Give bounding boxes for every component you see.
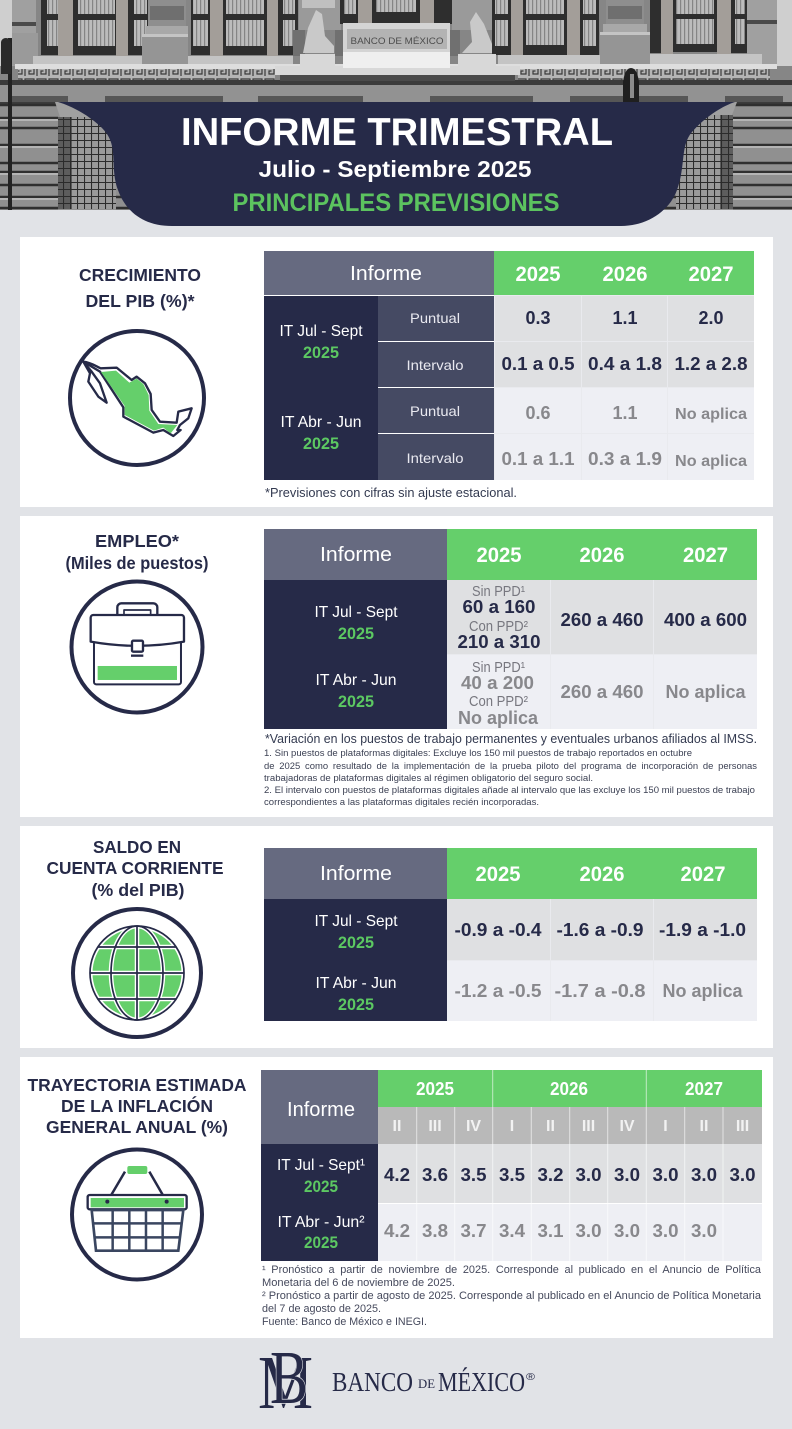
table: trayectoria de la inflación: IT Abr - Jun² bbox=[278, 1214, 365, 1231]
table: trayectoria de la inflación: 3.0 bbox=[691, 1165, 717, 1185]
table: empleo: 2025 bbox=[476, 543, 522, 567]
table: empleo: 2027 bbox=[683, 543, 728, 567]
table: crecimiento del PIB: 0.3 a 1.9 bbox=[588, 449, 662, 469]
table: empleo: 2025 bbox=[338, 625, 374, 643]
table: empleo: 60 a 160 bbox=[462, 597, 536, 617]
header photo: Banco de México building bbox=[0, 0, 792, 210]
table: trayectoria de la inflación: III bbox=[428, 1118, 442, 1135]
logo: Banco de México bbox=[258, 1336, 536, 1425]
logo wordmark: DE bbox=[418, 1376, 435, 1391]
table: trayectoria de la inflación: 3.0 bbox=[691, 1221, 717, 1241]
footnotes: inflación: del 7 de agosto de 2025. bbox=[262, 1303, 381, 1315]
panel: trayectoria de la inflación bbox=[20, 1057, 773, 1338]
footnotes: inflación bbox=[262, 1264, 761, 1328]
table: empleo: 210 a 310 bbox=[458, 632, 540, 652]
table: saldo en cuenta corriente: -1.2 a -0.5 bbox=[454, 981, 542, 1001]
table: saldo en cuenta corriente: 2026 bbox=[580, 862, 625, 886]
heading: empleo bbox=[66, 531, 208, 573]
table: trayectoria de la inflación: 3.0 bbox=[576, 1165, 602, 1185]
table: trayectoria de la inflación: III bbox=[736, 1118, 749, 1135]
table: crecimiento del PIB: 2.0 bbox=[698, 308, 724, 328]
table: crecimiento del PIB: Intervalo bbox=[406, 357, 464, 373]
logo wordmark: BANCO bbox=[332, 1367, 413, 1397]
table: empleo: 260 a 460 bbox=[560, 610, 644, 630]
table: saldo en cuenta corriente: 2027 bbox=[680, 862, 726, 886]
table: trayectoria de la inflación bbox=[261, 1070, 762, 1261]
footnotes: empleo: trabajadoras de plataformas digitales al régimen obligatorio del seguro social. bbox=[264, 773, 593, 783]
table: crecimiento del PIB: No aplica bbox=[675, 406, 747, 423]
table: trayectoria de la inflación: Informe bbox=[287, 1099, 355, 1121]
table: empleo: No aplica bbox=[458, 708, 539, 728]
table: crecimiento del PIB bbox=[264, 251, 754, 480]
panel: crecimiento del PIB bbox=[20, 237, 773, 507]
table: saldo en cuenta corriente: IT Jul - Sept bbox=[314, 913, 398, 930]
table: saldo en cuenta corriente: No aplica bbox=[662, 981, 743, 1001]
panel: saldo en cuenta corriente bbox=[20, 826, 773, 1048]
footnotes: inflación: ¹ Pronóstico a partir de noviembre de 2025. Corresponde al publicado en el Anuncio de Política bbox=[262, 1264, 761, 1276]
icon: shopping basket bbox=[72, 1150, 202, 1280]
table: crecimiento del PIB: Informe bbox=[350, 263, 422, 285]
table: saldo en cuenta corriente: 2025 bbox=[476, 862, 521, 886]
footnotes: empleo bbox=[264, 732, 758, 807]
footnotes: empleo: 2. El intervalo con puestos de plataformas digitales añade al intervalo que las excluye los 150 mil puestos de trabajo bbox=[264, 785, 755, 795]
table: saldo en cuenta corriente: 2025 bbox=[338, 996, 374, 1014]
table: saldo en cuenta corriente: -1.7 a -0.8 bbox=[554, 981, 646, 1001]
table: empleo: Sin PPD¹ bbox=[472, 584, 525, 600]
logo wordmark bbox=[332, 1367, 536, 1397]
table: crecimiento del PIB: 2025 bbox=[303, 435, 339, 453]
table: crecimiento del PIB: 1.1 bbox=[612, 403, 638, 423]
table: trayectoria de la inflación: 2027 bbox=[685, 1079, 723, 1099]
icon: map of Mexico bbox=[70, 331, 204, 465]
table: empleo bbox=[264, 529, 757, 729]
table: trayectoria de la inflación: 3.1 bbox=[538, 1221, 564, 1241]
logo wordmark: ® bbox=[526, 1372, 536, 1383]
table: trayectoria de la inflación: 3.0 bbox=[652, 1165, 678, 1185]
table: trayectoria de la inflación: 3.5 bbox=[499, 1165, 525, 1185]
table: saldo en cuenta corriente: -1.6 a -0.9 bbox=[556, 920, 644, 940]
logo wordmark: MÉXICO bbox=[438, 1367, 525, 1397]
table: trayectoria de la inflación: 3.0 bbox=[730, 1165, 756, 1185]
table: crecimiento del PIB: IT Jul - Sept bbox=[280, 323, 363, 340]
table: crecimiento del PIB: 2027 bbox=[688, 262, 734, 286]
footnotes: inflación: Monetaria del 6 de noviembre de 2025. bbox=[262, 1277, 455, 1289]
table: empleo: Con PPD² bbox=[469, 619, 528, 635]
table: trayectoria de la inflación: II bbox=[393, 1118, 401, 1135]
table: trayectoria de la inflación: II bbox=[700, 1118, 708, 1135]
table: empleo: 2025 bbox=[338, 693, 374, 711]
table: trayectoria de la inflación: I bbox=[510, 1118, 514, 1135]
footnotes: empleo: 1. Sin puestos de plataformas digitales: Excluye los 150 mil puestos de trabajo reportados en octubre bbox=[264, 748, 692, 758]
table: saldo en cuenta corriente: -1.9 a -1.0 bbox=[659, 920, 746, 940]
table: trayectoria de la inflación: III bbox=[582, 1118, 595, 1135]
table: saldo en cuenta corriente: -0.9 a -0.4 bbox=[454, 920, 542, 940]
table: trayectoria de la inflación: IV bbox=[619, 1118, 635, 1135]
table: trayectoria de la inflación: I bbox=[663, 1118, 668, 1135]
table: trayectoria de la inflación: 3.0 bbox=[652, 1221, 678, 1241]
table: saldo en cuenta corriente: IT Abr - Jun bbox=[316, 975, 396, 992]
heading: trayectoria de la inflación bbox=[28, 1075, 247, 1137]
table: empleo: 2026 bbox=[580, 543, 625, 567]
table: trayectoria de la inflación: 2026 bbox=[550, 1079, 588, 1099]
table: empleo: Con PPD² bbox=[469, 694, 528, 710]
heading: saldo en cuenta corriente: (% del PIB) bbox=[92, 880, 184, 900]
table: empleo: 400 a 600 bbox=[664, 610, 747, 630]
table: crecimiento del PIB: Puntual bbox=[410, 403, 460, 419]
heading: trayectoria de la inflación: GENERAL ANUAL (%) bbox=[46, 1117, 228, 1137]
heading: trayectoria de la inflación: TRAYECTORIA ESTIMADA bbox=[28, 1075, 247, 1095]
table: trayectoria de la inflación: 4.2 bbox=[384, 1221, 410, 1241]
table: crecimiento del PIB: 2026 bbox=[602, 262, 648, 286]
footnotes: empleo: *Variación en los puestos de trabajo permanentes y eventuales urbanos afiliados al IMSS. bbox=[265, 732, 757, 746]
table: trayectoria de la inflación: 3.5 bbox=[460, 1165, 486, 1185]
subtitle: principales previsiones: PRINCIPALES PREVISIONES bbox=[232, 189, 560, 217]
title: Informe Trimestral: INFORME TRIMESTRAL bbox=[181, 111, 613, 154]
table: trayectoria de la inflación: 4.2 bbox=[384, 1165, 410, 1185]
heading: crecimiento del PIB: CRECIMIENTO bbox=[79, 265, 201, 285]
table: trayectoria de la inflación: IT Jul - Sept¹ bbox=[277, 1157, 365, 1174]
table: empleo: IT Abr - Jun bbox=[316, 672, 396, 689]
table: trayectoria de la inflación: 3.8 bbox=[422, 1221, 448, 1241]
title banner bbox=[58, 102, 735, 226]
table: empleo: No aplica bbox=[666, 682, 746, 702]
table: crecimiento del PIB: 1.2 a 2.8 bbox=[674, 354, 748, 374]
table: trayectoria de la inflación: 3.6 bbox=[422, 1165, 448, 1185]
table: empleo: 40 a 200 bbox=[461, 673, 534, 693]
header photo: Banco de México building: BANCO DE MÉXICO bbox=[350, 36, 444, 47]
table: crecimiento del PIB: IT Abr - Jun bbox=[280, 414, 362, 431]
heading: empleo: EMPLEO* bbox=[95, 531, 179, 551]
panel: empleo bbox=[20, 516, 773, 817]
footnotes: empleo: de 2025 como resultado de la implementación de la prueba piloto del programa de incorporación de personas bbox=[264, 761, 758, 771]
table: trayectoria de la inflación: IV bbox=[466, 1118, 481, 1135]
table: trayectoria de la inflación: 2025 bbox=[416, 1079, 454, 1099]
table: crecimiento del PIB: 0.6 bbox=[526, 403, 550, 423]
icon: briefcase bbox=[72, 582, 202, 712]
table: crecimiento del PIB: 0.3 bbox=[526, 308, 550, 328]
table: trayectoria de la inflación: 3.0 bbox=[576, 1221, 602, 1241]
table: trayectoria de la inflación: 2025 bbox=[304, 1234, 338, 1252]
logo monogram: B bbox=[270, 1336, 308, 1420]
table: trayectoria de la inflación: II bbox=[546, 1118, 555, 1135]
table: empleo: Sin PPD¹ bbox=[472, 660, 525, 676]
heading: trayectoria de la inflación: DE LA INFLACIÓN bbox=[61, 1095, 213, 1116]
table: crecimiento del PIB: 2025 bbox=[303, 344, 339, 362]
table: trayectoria de la inflación: 2025 bbox=[304, 1178, 338, 1196]
logo monogram: M bbox=[258, 1341, 313, 1425]
table: trayectoria de la inflación: 3.0 bbox=[614, 1221, 640, 1241]
table: crecimiento del PIB: 0.4 a 1.8 bbox=[588, 354, 662, 374]
subtitle: period: Julio - Septiembre 2025 bbox=[258, 156, 532, 182]
table: empleo: 260 a 460 bbox=[560, 682, 644, 702]
footnote: *Previsiones con cifras sin ajuste estacional. bbox=[265, 486, 517, 500]
table: crecimiento del PIB: 2025 bbox=[516, 262, 561, 286]
table: empleo: Informe bbox=[320, 544, 392, 566]
table: saldo en cuenta corriente: Informe bbox=[320, 863, 392, 885]
icon: globe bbox=[73, 909, 201, 1037]
table: trayectoria de la inflación: 3.2 bbox=[538, 1165, 564, 1185]
table: trayectoria de la inflación: 3.7 bbox=[460, 1221, 486, 1241]
table: crecimiento del PIB: No aplica bbox=[675, 453, 747, 470]
table: saldo en cuenta corriente: 2025 bbox=[338, 934, 374, 952]
heading: saldo en cuenta corriente bbox=[46, 837, 224, 900]
table: crecimiento del PIB: 0.1 a 1.1 bbox=[502, 449, 574, 469]
table: empleo: IT Jul - Sept bbox=[314, 604, 398, 621]
table: crecimiento del PIB: 0.1 a 0.5 bbox=[502, 354, 574, 374]
heading: empleo: (Miles de puestos) bbox=[66, 553, 208, 573]
footnotes: inflación: Fuente: Banco de México e INEGI. bbox=[262, 1316, 427, 1328]
footnotes: empleo: correspondientes a las plataformas digitales recién incorporadas. bbox=[264, 797, 539, 807]
table: crecimiento del PIB: Intervalo bbox=[406, 450, 464, 466]
table: crecimiento del PIB: 1.1 bbox=[612, 308, 638, 328]
heading: saldo en cuenta corriente: SALDO EN bbox=[93, 837, 181, 857]
heading: crecimiento del PIB bbox=[79, 265, 201, 311]
table: trayectoria de la inflación: 3.0 bbox=[614, 1165, 640, 1185]
table: trayectoria de la inflación: 3.4 bbox=[499, 1221, 525, 1241]
table: crecimiento del PIB: Puntual bbox=[410, 310, 460, 326]
footnotes: inflación: ² Pronóstico a partir de agosto de 2025. Corresponde al publicado en el Anuncio de Política Monetaria bbox=[262, 1290, 761, 1302]
heading: crecimiento del PIB: DEL PIB (%)* bbox=[86, 291, 195, 311]
table: saldo en cuenta corriente bbox=[264, 848, 757, 1021]
heading: saldo en cuenta corriente: CUENTA CORRIENTE bbox=[46, 858, 224, 878]
